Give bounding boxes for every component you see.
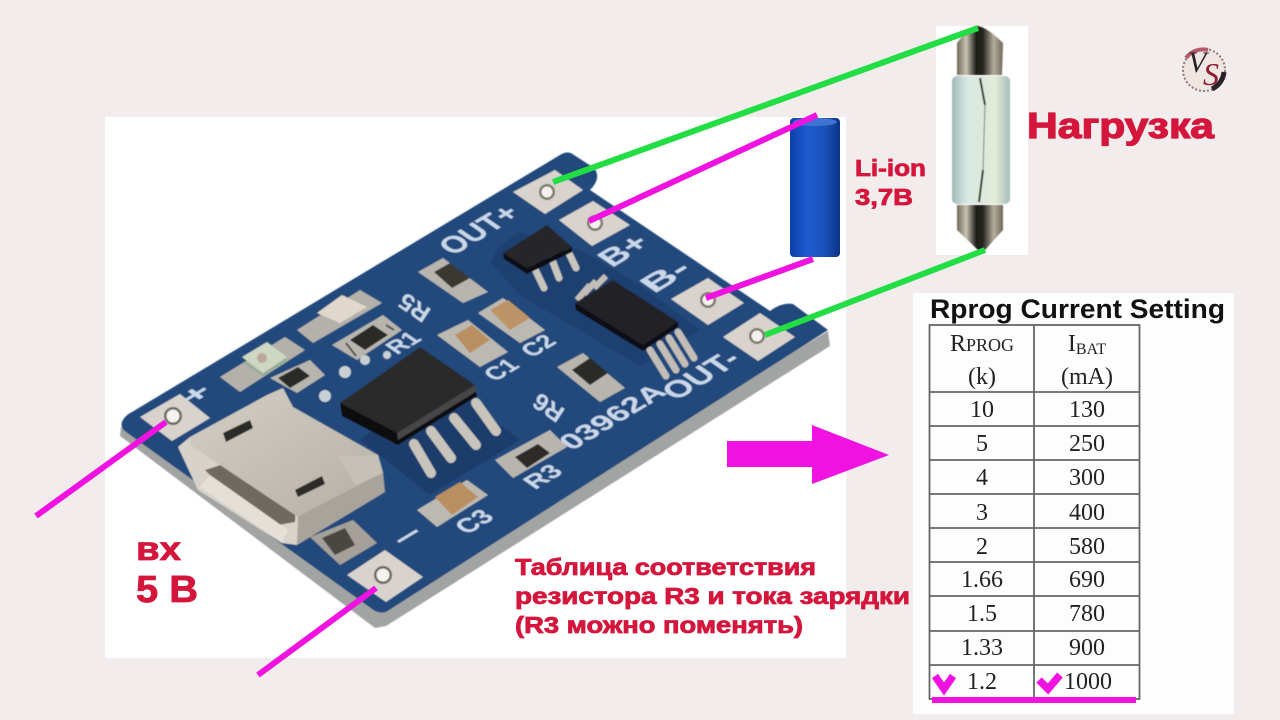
label: OUT-: OUT-	[653, 345, 748, 405]
magenta wire to battery minus	[706, 259, 813, 298]
resistor R1	[332, 315, 402, 360]
table rows: 580	[1069, 534, 1105, 560]
micro USB connector	[178, 388, 385, 545]
panel: current setting table	[913, 293, 1234, 714]
heading: load: Нагрузка	[1027, 105, 1215, 146]
label: input 5V: вх	[136, 530, 182, 567]
arrow to table	[727, 425, 889, 484]
magenta wire input plus	[36, 422, 166, 516]
table rows: 10	[970, 397, 994, 423]
pad: B+	[559, 201, 630, 246]
table rows: 690	[1069, 567, 1105, 593]
table rows: 130	[1069, 397, 1105, 423]
label: R3: R3	[518, 461, 569, 493]
chip: large SOP-8	[340, 347, 496, 473]
label: Li-ion 3,7V: 3,7В	[855, 184, 913, 210]
LED 2	[297, 290, 382, 343]
table header: BAT	[1076, 341, 1106, 358]
capacitor C3	[417, 480, 488, 527]
label: R5: R5	[395, 287, 435, 327]
table header: RPROG	[950, 331, 1014, 357]
battery	[790, 118, 840, 257]
panel: charger circuit board	[120, 152, 830, 628]
magenta wire to battery plus	[589, 115, 817, 221]
label: R6: R6	[529, 387, 569, 427]
capacitor C1	[437, 320, 508, 367]
table rows: 300	[1069, 465, 1105, 491]
resistor R2	[270, 360, 325, 393]
table rows: 3	[976, 500, 988, 526]
label: Li-ion 3,7V	[855, 155, 926, 210]
icon: festoon light bulb	[952, 26, 1010, 250]
pad: input minus	[347, 550, 423, 602]
resistor R6	[557, 353, 625, 402]
table header: (k)	[968, 364, 996, 390]
table rows: 780	[1069, 601, 1105, 627]
table rows: 1.33	[961, 635, 1003, 661]
board surface	[122, 152, 828, 613]
pad: B-	[671, 278, 744, 325]
label: input 5V	[136, 530, 198, 611]
caption: resistor table note	[515, 554, 910, 638]
table rows: 1.66	[961, 567, 1003, 593]
label: OUT+: OUT+	[430, 199, 527, 260]
label: B+: B+	[589, 229, 657, 272]
table title: Rprog Current Setting	[930, 294, 1225, 324]
resistor R3	[495, 430, 567, 478]
pad: OUT-	[723, 313, 795, 361]
table rows: 1.2	[967, 669, 997, 695]
pad: OUT+	[513, 170, 583, 214]
check mark right	[1039, 675, 1060, 689]
label: plus: +	[172, 379, 220, 410]
panel: board photo background	[105, 117, 846, 658]
caption: resistor table note: Таблица соответствия	[515, 554, 816, 580]
green wire to bulb bottom	[765, 250, 985, 335]
table header	[950, 331, 1113, 390]
pad: input plus	[140, 394, 210, 441]
logo: VS	[1183, 46, 1225, 92]
table header: I	[1068, 331, 1076, 357]
panel: bulb background	[936, 26, 1028, 255]
logo: VS: V	[1188, 46, 1210, 79]
chip: MSOP	[575, 276, 694, 376]
logo: VS: S	[1203, 56, 1219, 92]
label: minus: −	[384, 521, 432, 552]
caption: resistor table note: резистора R3 и тока зарядки	[515, 583, 910, 609]
table header: (mA)	[1061, 364, 1113, 390]
table rows	[961, 397, 1112, 695]
label: B-: B-	[631, 255, 699, 298]
table rows: 250	[1069, 431, 1105, 457]
solder under usb	[310, 520, 377, 565]
solder dots	[319, 351, 391, 402]
caption: resistor table note: (R3 можно поменять)	[515, 612, 803, 638]
LED 1	[220, 337, 305, 392]
label: input 5V: 5 В	[136, 569, 198, 611]
label: C2: C2	[515, 331, 562, 361]
chip: SOT-23	[503, 225, 576, 288]
label: R1: R1	[380, 328, 428, 358]
highlight underline	[932, 697, 1136, 703]
label: 03962A: 03962A	[552, 380, 673, 455]
green wire to bulb top	[553, 28, 978, 182]
check mark left	[935, 676, 953, 689]
table rows: 400	[1069, 500, 1105, 526]
label: Li-ion 3,7V: Li-ion	[855, 155, 926, 181]
table rows: 2	[976, 534, 988, 560]
label: C3: C3	[448, 505, 500, 538]
table rows: 5	[976, 431, 988, 457]
board edge	[120, 331, 830, 628]
table grid	[929, 325, 1140, 699]
silkscreen labels	[172, 199, 748, 552]
table rows: 1000	[1064, 669, 1112, 695]
capacitor C2	[478, 298, 545, 343]
magenta wire input minus	[258, 588, 376, 675]
table rows: 900	[1069, 635, 1105, 661]
table rows: 1.5	[967, 601, 997, 627]
resistor R5	[418, 258, 488, 303]
label: C1: C1	[478, 355, 526, 385]
table rows: 4	[976, 465, 988, 491]
